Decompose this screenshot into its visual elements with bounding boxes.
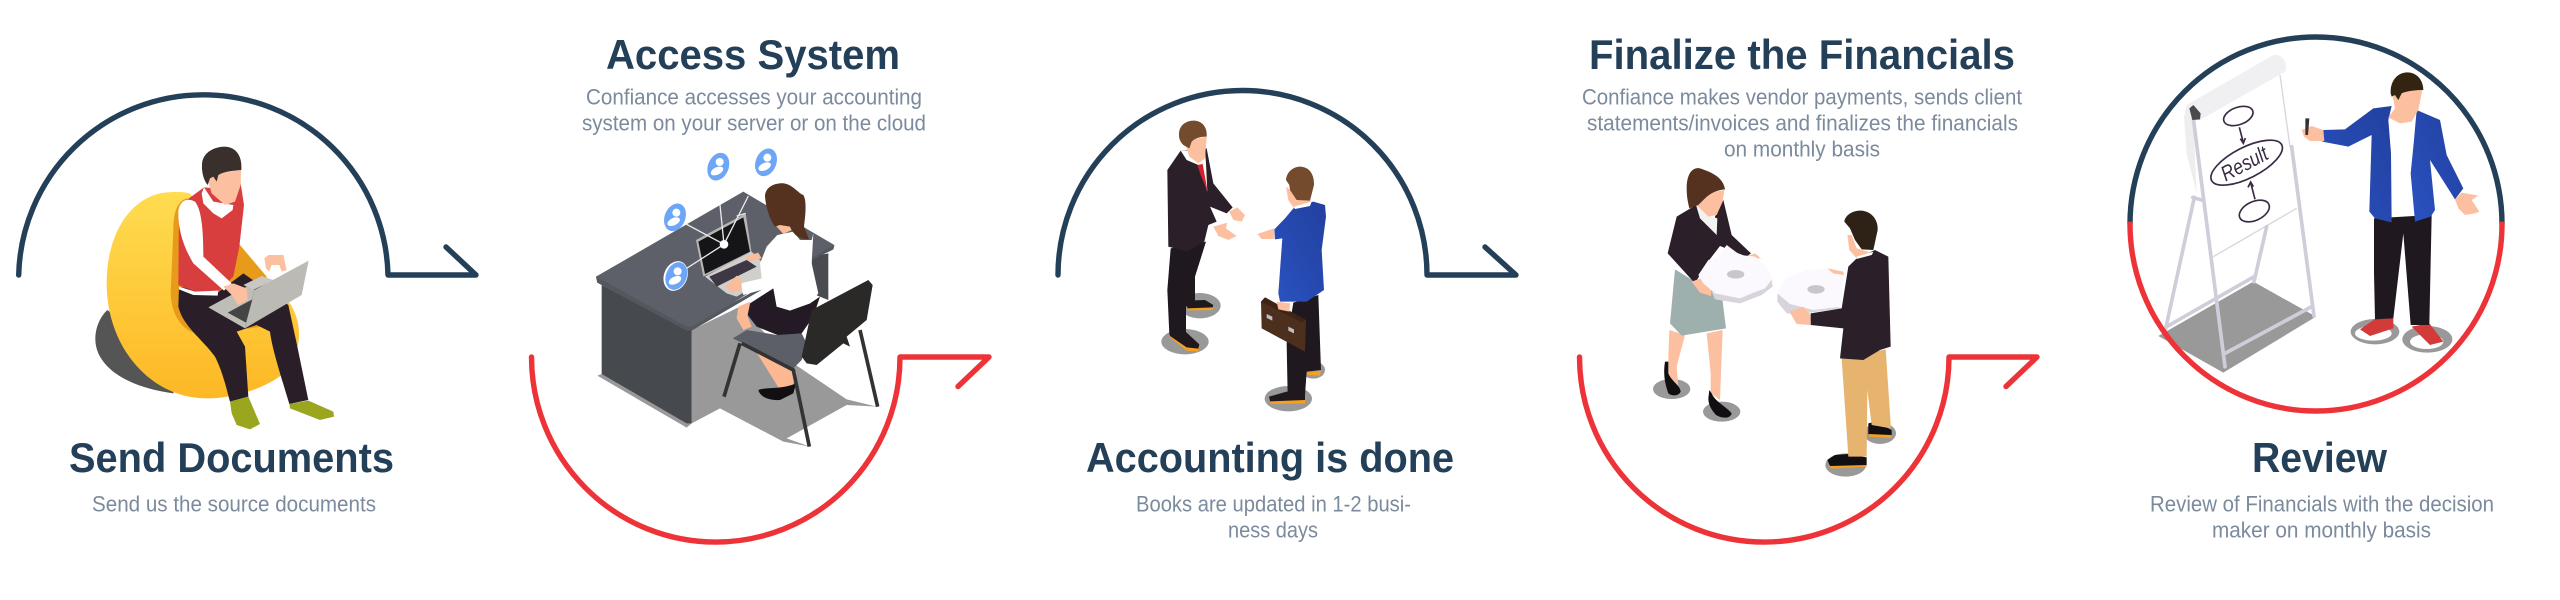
- text: accounting description: ness days: [1228, 518, 1318, 542]
- text: accounting description: Books are updated in 1-2 busi-: [1136, 492, 1411, 516]
- text: accounting description: [1136, 492, 1411, 542]
- heading: review: Review: [2252, 434, 2387, 481]
- text: finalize description: Confiance makes vendor payments, sends client: [1582, 85, 2022, 110]
- arc: red lower half of circle: [2130, 224, 2502, 411]
- illustration: two businessmen shaking hands: [1161, 121, 1326, 411]
- panel: send documents: [19, 95, 476, 516]
- text: access system description: Confiance accesses your accounting: [586, 85, 922, 110]
- illustration: man presenting at flipchart: [2158, 55, 2479, 373]
- panel: finalize the financials: [1580, 31, 2037, 542]
- heading: send documents: Send Documents: [69, 434, 394, 481]
- heading: accounting is done: Accounting is done: [1086, 434, 1454, 481]
- text: review description: [2150, 492, 2494, 542]
- arrow: navy arc step 3: [1058, 91, 1516, 275]
- flipchart label: result: Result: [2217, 141, 2273, 186]
- panel: access system: [532, 31, 989, 542]
- text: finalize description: statements/invoices and finalizes the financials: [1587, 110, 2018, 136]
- text: finalize description: on monthly basis: [1724, 136, 1880, 162]
- illustration: two people joining gears: [1653, 168, 1896, 477]
- text: review description: Review of Financials with the decision: [2150, 492, 2494, 516]
- panel: accounting is done: [1058, 91, 1516, 543]
- text: access system description: system on your server or on the cloud: [582, 110, 926, 136]
- arrow: red arc step 2: [532, 357, 989, 542]
- arrow: red arc step 4: [1580, 357, 2037, 542]
- panel: review: [2130, 37, 2502, 542]
- arrow: navy arc step 1: [19, 95, 476, 275]
- heading: access system: Access System: [606, 31, 900, 78]
- arc: navy upper half of circle: [2130, 37, 2502, 224]
- text: finalize description: [1582, 85, 2022, 162]
- illustration: man on beanbag with laptop: [95, 147, 334, 429]
- text: review description: maker on monthly basis: [2212, 518, 2431, 542]
- icons: user badges: [659, 145, 781, 295]
- heading: finalize the financials: Finalize the Financials: [1589, 31, 2015, 78]
- illustration: woman at desk with network icons: [596, 145, 878, 447]
- text: access system description: [582, 85, 926, 136]
- text: send documents description: Send us the source documents: [92, 492, 376, 516]
